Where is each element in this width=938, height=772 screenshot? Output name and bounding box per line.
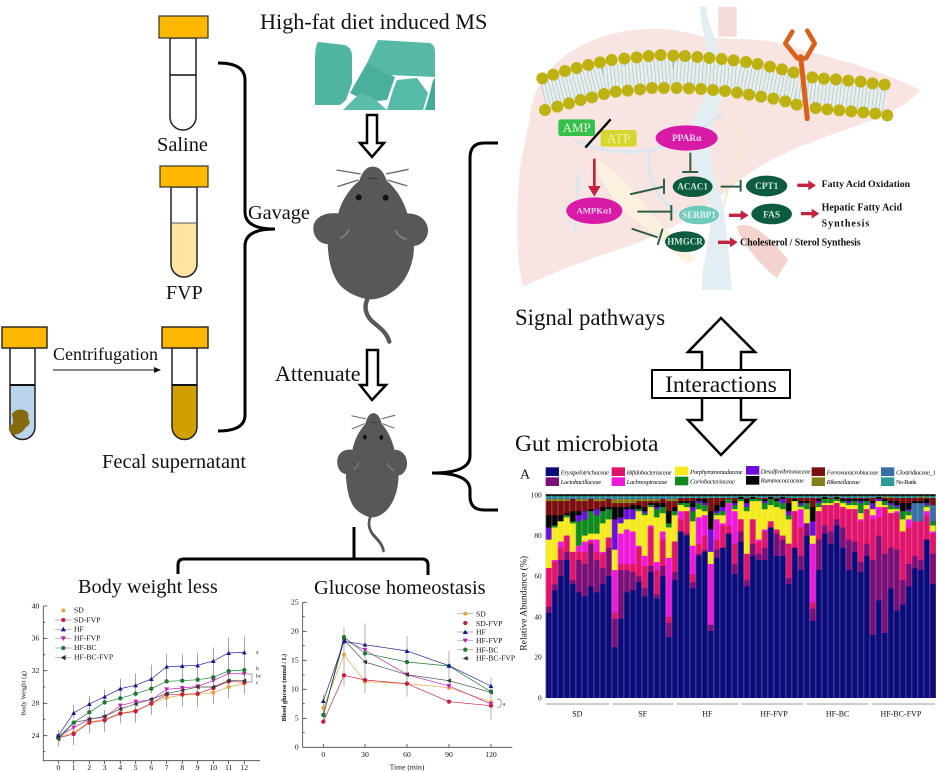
line chart: body weight: HF bbox=[74, 624, 84, 633]
line chart: body weight: HF-FVP bbox=[74, 634, 100, 643]
brace: gavage inputs bbox=[218, 63, 275, 431]
line chart: body weight: 0 bbox=[56, 763, 60, 772]
line chart: body weight: 5 bbox=[134, 763, 138, 772]
node: AMPKa1 bbox=[566, 197, 622, 224]
line chart: glucose homeostasis: HF-BC-FVP bbox=[476, 654, 515, 663]
line chart: glucose homeostasis: SD-FVP bbox=[476, 619, 502, 628]
y axis: 20 bbox=[534, 653, 542, 662]
legend: Erysipelotrichaceae bbox=[560, 470, 609, 477]
line chart: body weight: 40 bbox=[32, 601, 40, 610]
line chart: body weight: 24 bbox=[32, 731, 40, 740]
heading: glucose homeostasis: Glucose homeostasis bbox=[314, 577, 486, 599]
line chart: glucose homeostasis: Blood glucose (mmol / L) bbox=[281, 654, 288, 721]
node: PPARa: PPARα bbox=[672, 134, 702, 144]
line chart: body weight: b bbox=[256, 666, 259, 672]
y axis: 100 bbox=[531, 490, 542, 499]
group labels: HF-FVP bbox=[760, 709, 788, 718]
line chart: body weight: HF-BC bbox=[74, 643, 97, 652]
ATP label: ATP bbox=[607, 131, 631, 146]
legend: No Rank bbox=[896, 479, 917, 486]
line chart: body weight bbox=[20, 601, 262, 772]
title: high-fat diet induced MS: High-fat diet induced MS bbox=[260, 9, 487, 34]
line chart: body weight: Body Weight (g) bbox=[20, 671, 27, 716]
node: HMGCR bbox=[665, 231, 705, 252]
node: PPARa bbox=[656, 125, 718, 151]
line chart: body weight: 1 bbox=[72, 763, 76, 772]
double arrow: interactions bbox=[688, 318, 755, 455]
outcome: hepatic fatty acid synthesis bbox=[822, 203, 902, 229]
panel letter: A bbox=[520, 468, 530, 483]
line chart: body weight: 3 bbox=[103, 763, 107, 772]
line chart: glucose homeostasis: HF-FVP bbox=[476, 636, 502, 645]
legend: Desulfovibrionaceae bbox=[760, 468, 811, 475]
legend: Lachnospiraceae bbox=[626, 479, 667, 486]
brace: mouse to mechanisms bbox=[432, 143, 498, 510]
y axis: Relative Abundance (%) bbox=[519, 556, 530, 651]
ratio slash bbox=[585, 119, 611, 148]
legend bbox=[546, 466, 936, 486]
tube: saline bbox=[159, 16, 208, 130]
outcome: fatty acid oxidation: Fatty Acid Oxidation bbox=[822, 179, 911, 190]
bar separators bbox=[546, 292, 936, 772]
node: ACAC1 bbox=[673, 176, 713, 197]
icon: small mouse bbox=[337, 413, 407, 551]
node: ACAC1: ACAC1 bbox=[677, 182, 708, 192]
line chart: body weight: 8 bbox=[180, 763, 184, 772]
node: FAS: FAS bbox=[763, 210, 780, 220]
label: gavage: Gavage bbox=[248, 202, 310, 224]
line chart: body weight: bc bbox=[256, 673, 262, 679]
legend: Ferrovumicrobiaceae bbox=[826, 470, 878, 477]
legend: Lactobacillaceae bbox=[560, 479, 601, 486]
group labels: SF bbox=[638, 709, 648, 718]
y axis bbox=[519, 490, 542, 702]
line chart: glucose homeostasis: a bbox=[503, 701, 506, 707]
brace: outcomes bbox=[178, 527, 428, 575]
line chart: body weight: SD-FVP bbox=[74, 615, 100, 624]
liver background bbox=[517, 7, 920, 290]
line chart: body weight: 12 bbox=[240, 763, 248, 772]
group labels: SD bbox=[572, 709, 583, 718]
line chart: glucose homeostasis: 0 bbox=[295, 743, 299, 752]
group labels bbox=[546, 704, 935, 718]
receptor bbox=[785, 31, 815, 119]
AMP label: AMP bbox=[563, 120, 591, 135]
label: saline: Saline bbox=[157, 134, 208, 156]
outcome: hepatic fatty acid synthesis: Synthesis bbox=[822, 218, 869, 229]
node: SERBP1: SERBP1 bbox=[682, 210, 716, 220]
line chart: body weight: 11 bbox=[225, 763, 233, 772]
line chart: body weight: 32 bbox=[32, 666, 40, 675]
inhibition marks bbox=[630, 153, 741, 245]
group labels: HF bbox=[702, 709, 713, 718]
label: gut microbiota: Gut microbiota bbox=[515, 431, 659, 457]
line chart: glucose homeostasis: 15 bbox=[291, 656, 299, 665]
node: CPT1: CPT1 bbox=[755, 182, 779, 192]
line chart: glucose homeostasis: 20 bbox=[291, 627, 299, 636]
tube: fecal supernatant bbox=[162, 327, 208, 440]
line chart: glucose homeostasis: 25 bbox=[291, 598, 299, 607]
line chart: glucose homeostasis: 120 bbox=[485, 750, 497, 759]
line chart: body weight: 2 bbox=[87, 763, 91, 772]
node: HMGCR: HMGCR bbox=[667, 237, 703, 247]
cell membrane bbox=[542, 55, 887, 115]
line chart: body weight: 36 bbox=[32, 634, 40, 643]
arrow: mouse to treated mouse bbox=[360, 350, 386, 400]
line chart: body weight: 6 bbox=[149, 763, 153, 772]
line chart: glucose homeostasis: 30 bbox=[361, 750, 369, 759]
line chart: body weight: 10 bbox=[209, 763, 217, 772]
arrow: AMP/ATP to AMPK bbox=[588, 159, 601, 197]
outcome: cholesterol synthesis: Cholesterol / Sterol Synthesis bbox=[740, 237, 861, 248]
y axis: 40 bbox=[534, 612, 542, 621]
line chart: glucose homeostasis: 60 bbox=[403, 750, 411, 759]
line chart: body weight: c bbox=[256, 680, 259, 686]
arrow: centrifugation bbox=[53, 367, 161, 373]
group labels: HF-BC bbox=[826, 709, 849, 718]
legend: Porphyromonadaceae bbox=[689, 469, 743, 476]
line chart: body weight: HF-BC-FVP bbox=[74, 653, 113, 662]
ATP label bbox=[601, 130, 637, 147]
label box: interactions: Interactions bbox=[665, 372, 777, 398]
legend: Rikenellaceae bbox=[826, 479, 860, 486]
line chart: glucose homeostasis: SD bbox=[476, 609, 486, 618]
line chart: body weight: 4 bbox=[118, 763, 122, 772]
line chart: body weight: a bbox=[256, 649, 259, 655]
line chart: glucose homeostasis: 10 bbox=[291, 685, 299, 694]
node: AMPKa1: AMPKα1 bbox=[577, 206, 612, 216]
photo: teal high-fat diet pellets bbox=[315, 40, 435, 110]
activation arrows bbox=[718, 180, 819, 247]
label: FVP: FVP bbox=[166, 282, 203, 304]
AMP label bbox=[558, 119, 595, 136]
line chart: glucose homeostasis: HF-BC bbox=[476, 645, 499, 654]
label: signal pathways: Signal pathways bbox=[515, 305, 665, 330]
line chart: glucose homeostasis: 90 bbox=[445, 750, 453, 759]
label: fecal supernatant: Fecal supernatant bbox=[102, 451, 246, 473]
arrow: diet to mouse bbox=[360, 115, 384, 157]
node: FAS bbox=[751, 204, 792, 224]
label: attenuate: Attenuate bbox=[275, 361, 361, 386]
y axis: 80 bbox=[534, 531, 542, 540]
panel: liver signal pathways bbox=[517, 7, 920, 290]
tube: fecal suspension bbox=[2, 327, 47, 440]
legend: Clostridiaceae_1 bbox=[896, 470, 936, 477]
outcome: hepatic fatty acid synthesis: Hepatic Fatty Acid bbox=[822, 203, 902, 214]
y axis: 0 bbox=[538, 693, 542, 702]
line chart: glucose homeostasis: 0 bbox=[321, 750, 325, 759]
legend: Bifidobacteriaceae bbox=[627, 470, 672, 477]
bar chart: relative abundance bbox=[519, 466, 936, 718]
line chart: glucose homeostasis: 5 bbox=[295, 714, 299, 723]
stacked bars bbox=[546, 494, 936, 698]
legend: Coriobacteriaceae bbox=[690, 478, 735, 485]
line chart: body weight: 7 bbox=[165, 763, 169, 772]
line chart: glucose homeostasis: Time (min) bbox=[390, 762, 425, 771]
tube: FVP bbox=[160, 166, 208, 277]
line chart: body weight: SD bbox=[74, 606, 84, 615]
label: centrifugation: Centrifugation bbox=[53, 344, 158, 364]
line chart: body weight: 28 bbox=[32, 699, 40, 708]
node: SERBP1 bbox=[679, 206, 719, 224]
legend: Ruminococcaceae bbox=[760, 478, 804, 485]
node: CPT1 bbox=[746, 176, 787, 196]
line chart: glucose homeostasis: HF bbox=[476, 627, 486, 636]
line chart: glucose homeostasis bbox=[281, 598, 515, 771]
y axis: 60 bbox=[534, 572, 542, 581]
group labels: HF-BC-FVP bbox=[881, 709, 922, 718]
line chart: body weight: 9 bbox=[196, 763, 200, 772]
heading: body weight less: Body weight less bbox=[78, 576, 218, 598]
icon: large mouse bbox=[313, 167, 428, 342]
